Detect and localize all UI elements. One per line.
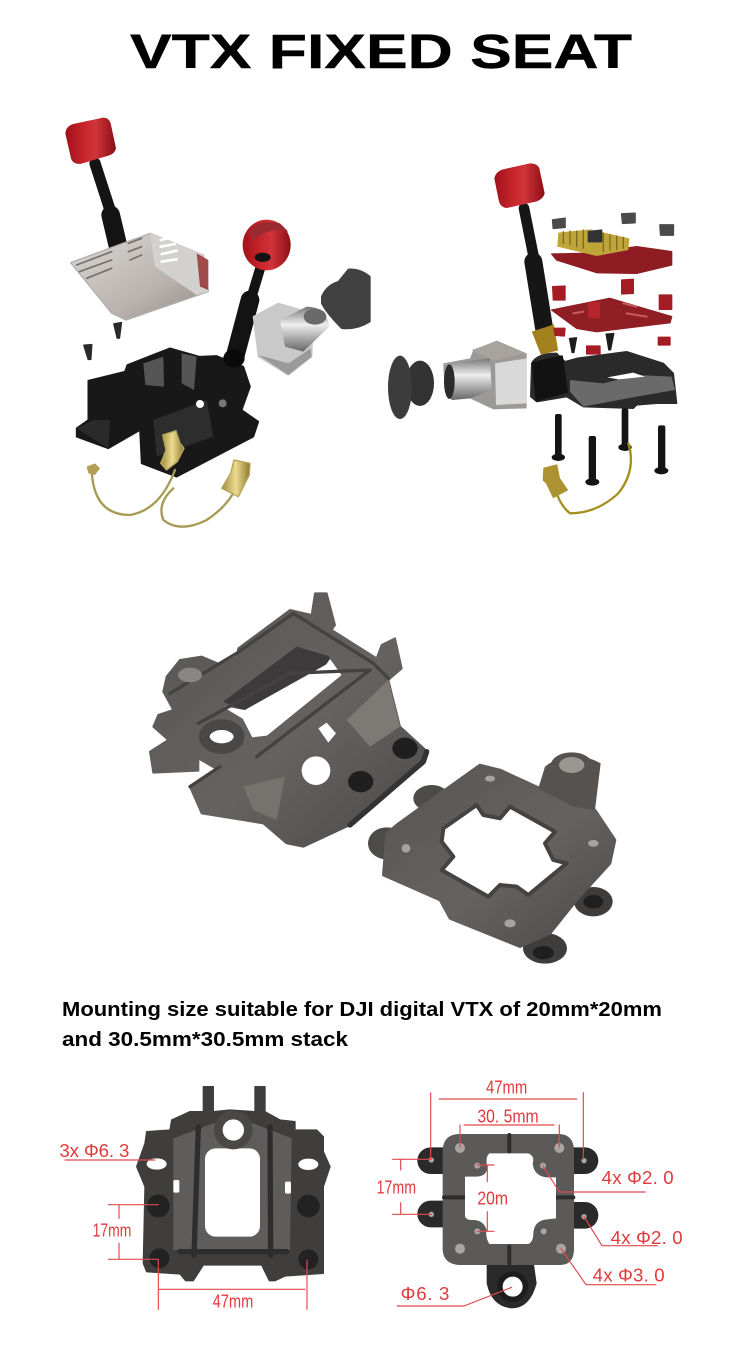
second antenna bbox=[223, 220, 291, 368]
upper nuts bbox=[553, 213, 673, 235]
label 47mm bbox=[431, 1076, 583, 1159]
label phi 6.3 bbox=[397, 1283, 512, 1306]
red spacers bbox=[553, 279, 672, 354]
label 20mm bbox=[477, 1165, 508, 1231]
line 1: Mounting size suitable for DJI digital VTX of 20mm*20mm bbox=[62, 999, 662, 1021]
line 2: and 30.5mm*30.5mm stack bbox=[62, 1029, 349, 1051]
plate body bbox=[443, 1134, 574, 1265]
small screws bbox=[569, 333, 614, 353]
dimension diagram: seat top view bbox=[59, 1087, 330, 1311]
lens cap bbox=[388, 356, 434, 419]
label 47mm bbox=[158, 1260, 307, 1311]
black seat frame bbox=[77, 348, 258, 477]
small connector bbox=[87, 463, 100, 475]
label 47mm: 47mm bbox=[486, 1076, 527, 1097]
seat silhouette bbox=[137, 1087, 330, 1281]
label 4x phi 3.0: 4x Φ3. 0 bbox=[593, 1264, 665, 1285]
label 4x phi 2.0 lower: 4x Φ2. 0 bbox=[611, 1227, 683, 1248]
gold heatsink and red board bbox=[552, 229, 672, 273]
stack holes bbox=[429, 1143, 587, 1254]
SMA connector bbox=[543, 465, 567, 497]
label 4x phi 2.0 upper: 4x Φ2. 0 bbox=[602, 1167, 674, 1188]
lower red board bbox=[552, 298, 672, 332]
silver VTX plate bbox=[71, 233, 208, 320]
camera bbox=[443, 341, 527, 409]
label phi 6.3: Φ6. 3 bbox=[401, 1283, 449, 1304]
label 17mm bbox=[93, 1205, 158, 1259]
title: VTX FIXED SEAT bbox=[130, 26, 632, 79]
antenna: upper left bbox=[66, 118, 143, 305]
exploded view: right assembly bbox=[388, 164, 677, 513]
lens ring hole bbox=[500, 1274, 525, 1299]
camera bbox=[253, 303, 329, 375]
description text bbox=[62, 999, 662, 1051]
antenna bbox=[495, 164, 557, 354]
coax cable bbox=[557, 443, 631, 513]
product photo: translucent seat parts bbox=[150, 593, 615, 964]
ribs bbox=[180, 1127, 287, 1255]
label 20mm: 20m bbox=[477, 1187, 508, 1208]
gold connector: right bbox=[222, 460, 250, 497]
label 47mm: 47mm bbox=[213, 1290, 253, 1311]
centre cut-out bbox=[465, 1153, 556, 1244]
label 30.5mm bbox=[460, 1105, 559, 1147]
seat upper part bbox=[150, 593, 427, 847]
label 4x phi 3.0 bbox=[561, 1249, 665, 1285]
mounting holes bbox=[147, 1195, 320, 1269]
top ring bbox=[218, 1115, 248, 1145]
seat base plate bbox=[368, 752, 615, 964]
inner panel bbox=[173, 1123, 292, 1250]
screw pair bbox=[84, 323, 121, 359]
coax cables bbox=[92, 470, 235, 527]
ears and lens ring bbox=[417, 1147, 598, 1308]
plate grooves bbox=[444, 1135, 573, 1263]
label 3x phi 6.3: 3x Φ6. 3 bbox=[59, 1140, 129, 1161]
dimension diagram: base plate top view bbox=[377, 1076, 683, 1308]
label 17mm left: 17mm bbox=[377, 1176, 416, 1197]
cut-outs bbox=[147, 1148, 318, 1237]
gold connector: center bbox=[161, 431, 184, 470]
long screws bbox=[552, 408, 668, 486]
label 17mm: 17mm bbox=[93, 1220, 131, 1241]
label 17mm left bbox=[377, 1159, 431, 1214]
seat base bbox=[531, 352, 677, 408]
exploded view: left assembly bbox=[66, 118, 370, 527]
label 4x phi 2.0 upper bbox=[543, 1166, 674, 1192]
label 30.5mm: 30. 5mm bbox=[477, 1105, 539, 1126]
label 4x phi 2.0 lower bbox=[584, 1217, 683, 1248]
lens cap bbox=[322, 269, 370, 329]
